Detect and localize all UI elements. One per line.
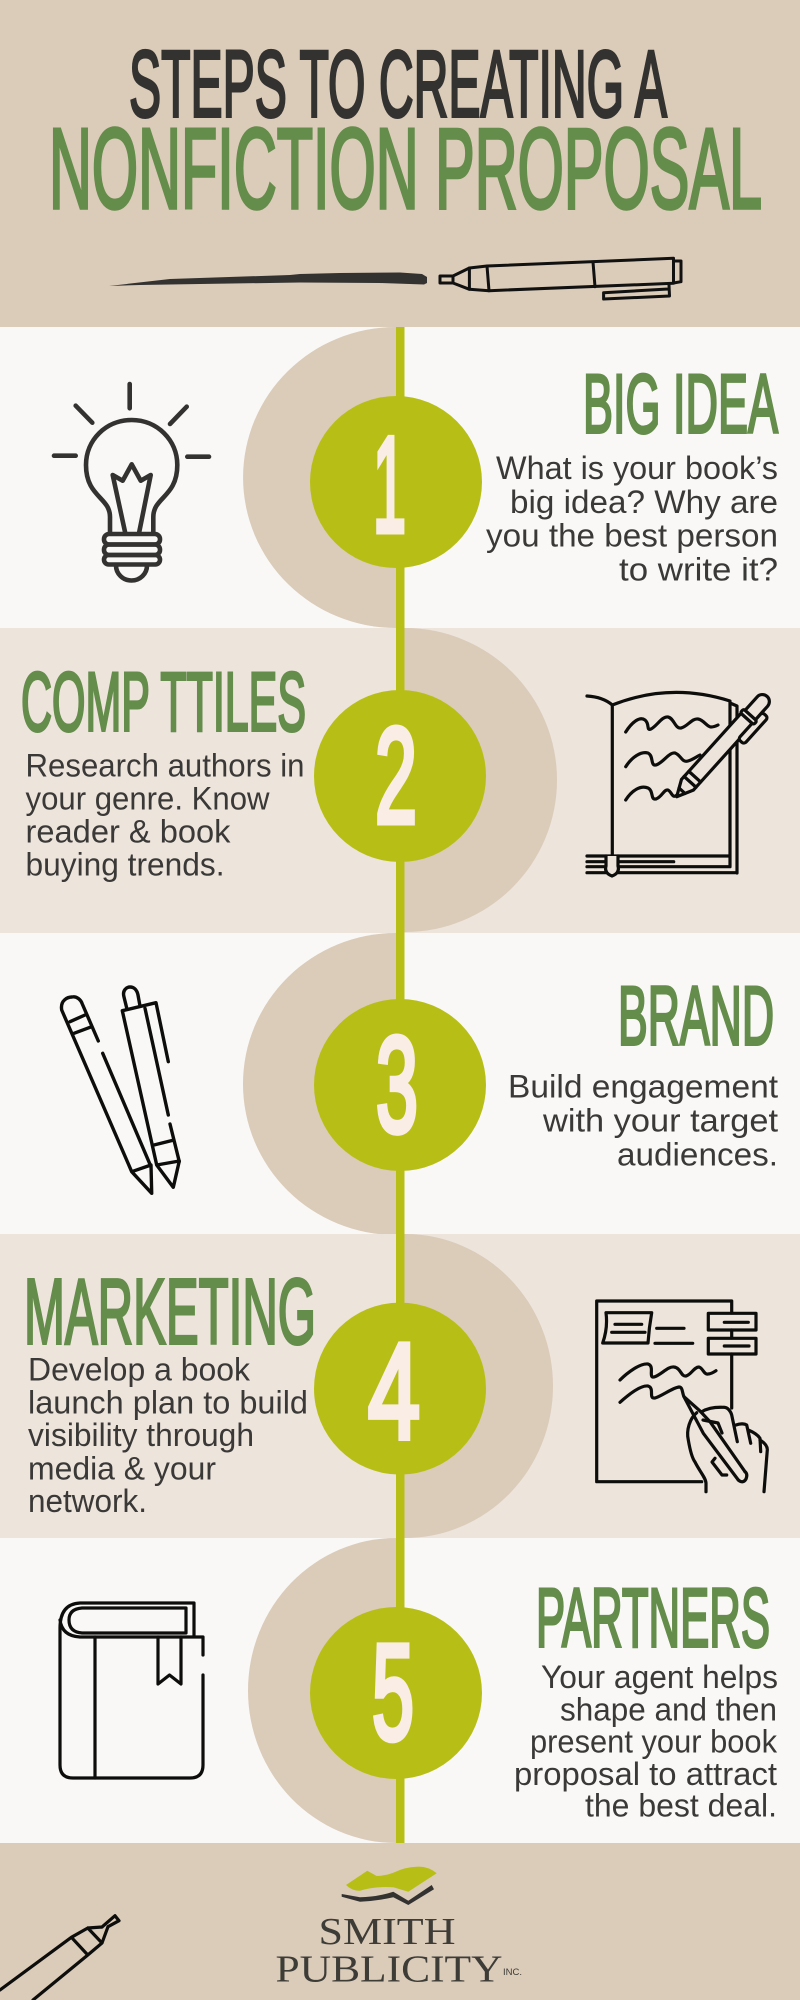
text: brand body bbox=[508, 1069, 778, 1173]
logo wordmark: PUBLICITY bbox=[276, 1949, 502, 1991]
panel: step 4 marketing bbox=[0, 1234, 800, 1538]
text: brand body: with your target bbox=[542, 1103, 778, 1139]
icon: notebook and pen bbox=[587, 690, 778, 876]
text: marketing body bbox=[28, 1352, 308, 1519]
panel: step 1 big idea bbox=[0, 327, 800, 628]
text: big idea body: you the best person bbox=[486, 518, 778, 554]
number badge 2 bbox=[314, 690, 486, 862]
text: marketing body: Develop a book bbox=[28, 1352, 251, 1388]
logo wordmark: SMITH bbox=[318, 1911, 456, 1953]
logo wordmark: INC. bbox=[503, 1967, 522, 1977]
text: big idea body: What is your book’s bbox=[496, 450, 778, 486]
text: comp titles body: your genre. Know bbox=[26, 780, 270, 816]
text: comp titles body bbox=[26, 748, 304, 882]
number badge 2: 2 bbox=[375, 700, 417, 852]
text: marketing body: media & your bbox=[28, 1450, 216, 1486]
text: comp titles body: reader & book bbox=[26, 814, 232, 850]
text: big idea body bbox=[486, 450, 778, 588]
panel: footer bbox=[0, 1843, 800, 2000]
text: partners body: the best deal. bbox=[585, 1788, 777, 1824]
number badge 1: 1 bbox=[373, 408, 406, 560]
text: marketing body: launch plan to build bbox=[28, 1384, 308, 1420]
panel: step 2 comp titles bbox=[0, 628, 800, 933]
number badge 5: 5 bbox=[372, 1616, 414, 1768]
icon: hand writing on a document bbox=[597, 1301, 767, 1492]
number badge 5 bbox=[310, 1607, 482, 1779]
brush stroke bbox=[109, 272, 427, 286]
text: partners body: present your book bbox=[530, 1724, 778, 1760]
icon: pencil and pen bbox=[61, 987, 179, 1193]
number badge 4 bbox=[314, 1303, 486, 1475]
text: comp titles body: buying trends. bbox=[26, 846, 224, 882]
icon: light bulb bbox=[54, 384, 209, 580]
text: partners body: shape and then bbox=[560, 1692, 777, 1728]
number badge 4: 4 bbox=[368, 1315, 420, 1467]
number badge 3: 3 bbox=[376, 1008, 418, 1160]
text: marketing body: network. bbox=[28, 1483, 147, 1519]
number badge 1 bbox=[310, 396, 482, 568]
text: partners body: Your agent helps bbox=[541, 1659, 778, 1695]
panel: step 3 brand bbox=[0, 933, 800, 1235]
text: big idea body: to write it? bbox=[619, 552, 778, 588]
heading: comp titles: COMP TTILES bbox=[21, 654, 306, 748]
text: brand body: Build engagement bbox=[508, 1069, 778, 1105]
text: partners body bbox=[514, 1659, 778, 1824]
icon: marker pen bbox=[440, 258, 681, 299]
icon: pen nib corner bbox=[0, 1916, 119, 2000]
text: big idea body: big idea? Why are bbox=[510, 484, 778, 520]
logo wordmark bbox=[276, 1911, 522, 1991]
text: marketing body: visibility through bbox=[28, 1417, 254, 1453]
number badge 3 bbox=[314, 999, 486, 1171]
text: comp titles body: Research authors in bbox=[26, 748, 304, 784]
icon: closed book with bookmark bbox=[60, 1603, 203, 1778]
panel: header bbox=[0, 0, 800, 327]
logo mark: open book bbox=[342, 1867, 437, 1905]
panel: step 5 partners bbox=[0, 1538, 800, 1843]
heading: marketing: MARKETING bbox=[24, 1260, 316, 1364]
text: brand body: audiences. bbox=[617, 1137, 778, 1173]
text: partners body: proposal to attract bbox=[514, 1756, 777, 1792]
